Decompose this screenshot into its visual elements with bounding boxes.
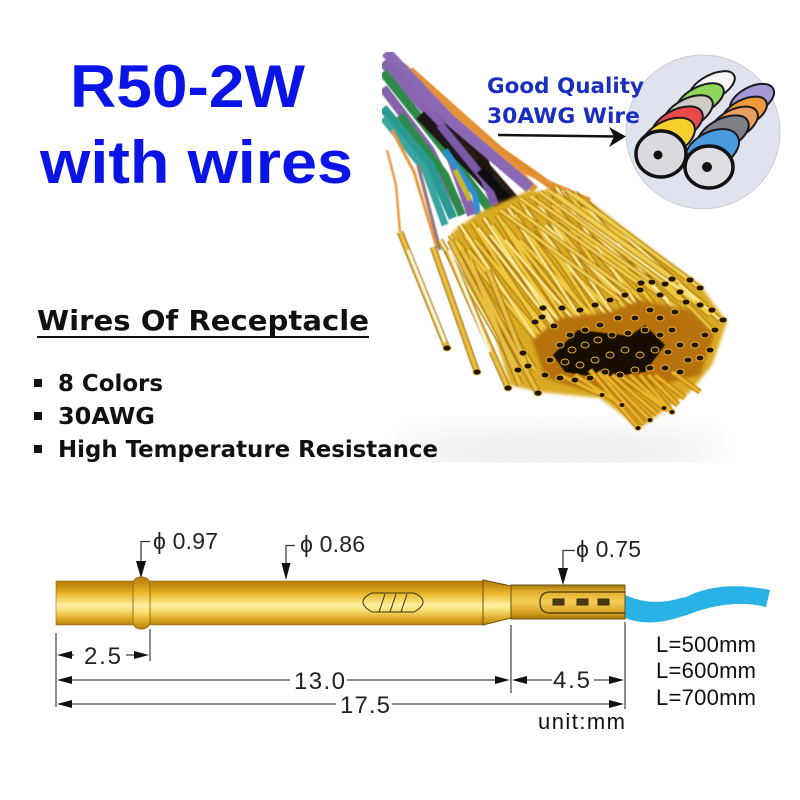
- feature list: 8 Colors: [58, 371, 163, 397]
- callout text: [487, 74, 644, 128]
- title: with wires: [39, 129, 353, 196]
- gold mass: [452, 190, 727, 428]
- separated front pins: [400, 232, 538, 393]
- dimension lines: [56, 622, 625, 709]
- inset circle: [626, 55, 780, 209]
- arrow to spools: [498, 127, 626, 147]
- diameter labels: ϕ 0.97: [153, 528, 218, 554]
- dimension labels: 13.0: [294, 668, 345, 695]
- dimension labels: 4.5: [553, 667, 590, 694]
- wire length options: [656, 632, 756, 710]
- tube ends: [443, 276, 727, 430]
- lower tubes: [560, 370, 700, 428]
- gold tube bundle: [440, 187, 720, 382]
- callout: wire spools inset: [487, 55, 780, 209]
- blue wire: [625, 586, 770, 623]
- feature list: High Temperature Resistance: [58, 437, 438, 463]
- pin body: [56, 581, 484, 625]
- callout text: Good Quality: [487, 74, 644, 98]
- coloured wires: [383, 52, 590, 250]
- unit note: unit:mm: [538, 709, 625, 734]
- dimension arrowheads: [57, 651, 624, 708]
- dimension labels: [84, 643, 590, 719]
- wire length options: L=600mm: [656, 658, 756, 683]
- photo: bundle of wired receptacle pins: [383, 52, 727, 472]
- title: R50-2W: [70, 53, 305, 120]
- dimension labels: 2.5: [84, 643, 121, 670]
- heading: wires of receptacle: Wires Of Receptacle: [37, 304, 369, 337]
- feature list: [34, 371, 438, 463]
- pin tip: [511, 585, 625, 619]
- pin taper: [483, 580, 511, 625]
- diameter labels: [153, 528, 641, 562]
- callout text: 30AWG Wire: [487, 104, 640, 128]
- diameter labels: ϕ 0.75: [576, 536, 641, 562]
- collar: [133, 577, 150, 629]
- dark tube interior: [532, 300, 714, 392]
- diameter arrows: [136, 542, 575, 585]
- tip window: [540, 592, 625, 613]
- wire length options: L=700mm: [656, 685, 756, 710]
- title: [39, 53, 353, 196]
- crimp slot: [363, 593, 423, 612]
- wire length options: L=500mm: [656, 632, 756, 657]
- diagram: receptacle pin: [56, 528, 770, 734]
- diameter labels: ϕ 0.86: [300, 531, 365, 557]
- spools: [634, 65, 779, 188]
- feature list: 30AWG: [58, 404, 155, 430]
- dimension labels: 17.5: [340, 692, 390, 719]
